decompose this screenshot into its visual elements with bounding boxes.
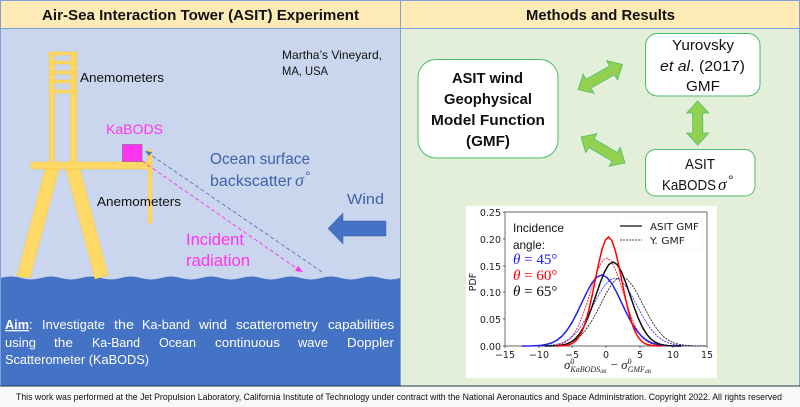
x axis label: dB	[645, 369, 652, 375]
incidence angle key: angle:	[513, 238, 545, 252]
text: aim: Doppler	[347, 335, 395, 350]
icon: KaBODS instrument	[122, 144, 142, 162]
chart: PDF of residuals	[466, 206, 717, 378]
text: aim: the	[114, 317, 134, 332]
arrow: GMF to KaBODS	[575, 128, 631, 172]
y axis ticks	[480, 208, 501, 353]
label: ocean surface backscatter: °	[305, 168, 311, 184]
text: aim: continuous	[215, 335, 281, 350]
text: aim	[5, 317, 395, 367]
left panel header	[0, 0, 400, 28]
label: anemometers upper: Anemometers	[80, 70, 165, 85]
x axis label: σ	[564, 357, 570, 372]
x axis label: 0	[628, 357, 632, 366]
text: aim: Ocean	[159, 335, 196, 350]
x axis label: σ	[621, 357, 628, 372]
backscatter dashed arrow	[145, 151, 322, 272]
footer: acknowledgement: This work was performed at the Jet Propulsion Laboratory, California Institute of Technology under contract with the National Aeronautics and Space Administration. Copyright 2022. All rights reserved	[16, 392, 782, 402]
text: aim: the	[54, 335, 73, 350]
label: KaBODS: KaBODS	[106, 121, 163, 137]
text: aim: Aim	[5, 317, 29, 332]
text: aim: Investigate	[42, 317, 105, 332]
label: wind: Wind	[347, 191, 384, 208]
box: ASIT KaBODS sigma: ASIT	[685, 157, 715, 173]
text: aim: wind	[198, 317, 227, 332]
x axis label: −	[607, 357, 621, 372]
x axis ticks: −10	[529, 350, 549, 361]
text: aim: :	[29, 317, 33, 332]
right panel header	[400, 0, 800, 28]
x axis label: dB	[600, 369, 607, 375]
x axis ticks: 15	[701, 350, 713, 361]
x axis ticks: 5	[637, 350, 643, 361]
x axis ticks: 0	[603, 350, 609, 361]
incidence angle key: θ = 45°	[513, 252, 557, 268]
text: aim: Ka-Band	[92, 335, 140, 350]
arrow: wind direction	[328, 213, 386, 244]
incidence angle key: θ = 60°	[513, 268, 557, 284]
text: aim: Ka-band	[142, 317, 190, 332]
text: aim: wave	[297, 335, 328, 350]
box: ASIT wind GMF: (GMF)	[466, 133, 510, 150]
x axis label: KaBODS	[569, 365, 600, 374]
y axis ticks: 0.25	[480, 208, 501, 219]
box: Yurovsky GMF: GMF	[686, 79, 720, 95]
label: ocean surface backscatter: σ	[295, 170, 305, 190]
box: Yurovsky GMF: Yurovsky	[672, 38, 735, 54]
y axis ticks: 0.15	[480, 262, 501, 273]
box: ASIT KaBODS sigma: σ	[718, 175, 727, 194]
label: incident radiation	[186, 231, 250, 270]
box: Yurovsky GMF	[646, 34, 760, 96]
legend: Y. GMF	[649, 236, 685, 247]
label: incident radiation: Incident	[186, 231, 244, 249]
panel: methods and results	[400, 0, 800, 386]
incidence angle key: Incidence	[513, 221, 564, 235]
legend	[617, 218, 702, 250]
right panel header: Methods and Results	[526, 7, 675, 24]
label: anemometers lower: Anemometers	[97, 194, 182, 209]
box: Yurovsky GMF: et al. (2017)	[660, 59, 745, 75]
arrow: Yurovsky to KaBODS	[687, 101, 709, 145]
tower structure	[17, 52, 152, 279]
y axis ticks: 0.00	[480, 342, 501, 353]
label: location	[282, 48, 382, 78]
y axis ticks: 0.20	[480, 235, 501, 246]
box: ASIT wind GMF: ASIT wind	[452, 70, 523, 87]
box: ASIT wind GMF: Geophysical	[444, 91, 532, 108]
left panel header: Air-Sea Interaction Tower (ASIT) Experiment	[42, 7, 359, 24]
x axis ticks	[495, 350, 713, 361]
incidence angle key	[513, 221, 564, 300]
text: aim: capabilities	[328, 317, 394, 332]
x axis ticks: −15	[495, 350, 515, 361]
x axis ticks: −5	[565, 350, 579, 361]
incidence angle key: θ = 65°	[513, 284, 557, 300]
label: ocean surface backscatter: backscatter	[210, 173, 292, 190]
y axis label: PDF	[468, 273, 479, 291]
footer: acknowledgement	[0, 386, 800, 407]
panel: ASIT experiment	[0, 0, 400, 386]
box: ASIT KaBODS sigma: KaBODS	[662, 178, 716, 194]
label: incident radiation: radiation	[186, 252, 250, 270]
x axis ticks: 10	[667, 350, 679, 361]
box: ASIT wind GMF: Model Function	[431, 112, 545, 129]
box: ASIT KaBODS sigma: °	[728, 172, 734, 188]
incident radiation dashed arrow	[142, 161, 303, 272]
plot frame	[503, 212, 707, 348]
text: aim: scatterometry	[236, 317, 319, 332]
box: ASIT KaBODS sigma	[646, 150, 755, 196]
text: aim: using	[5, 335, 36, 350]
y axis ticks: 0.05	[480, 315, 501, 326]
ocean	[1, 276, 400, 386]
curves: solid	[522, 237, 682, 346]
label: location: Martha’s Vineyard,	[282, 48, 382, 62]
label: ocean surface backscatter: Ocean surface	[210, 151, 310, 168]
text: aim: Scatterometer (KaBODS)	[5, 352, 149, 367]
label: location: MA, USA	[282, 64, 328, 78]
x axis label: 0	[570, 357, 574, 366]
y axis ticks: 0.10	[480, 288, 501, 299]
label: ocean surface backscatter	[210, 151, 311, 190]
curves: dashed	[529, 258, 706, 346]
box: ASIT wind GMF	[418, 60, 558, 158]
arrow: GMF to Yurovsky	[573, 55, 628, 99]
x axis label: GMF	[628, 365, 645, 374]
legend: ASIT GMF	[650, 222, 699, 233]
